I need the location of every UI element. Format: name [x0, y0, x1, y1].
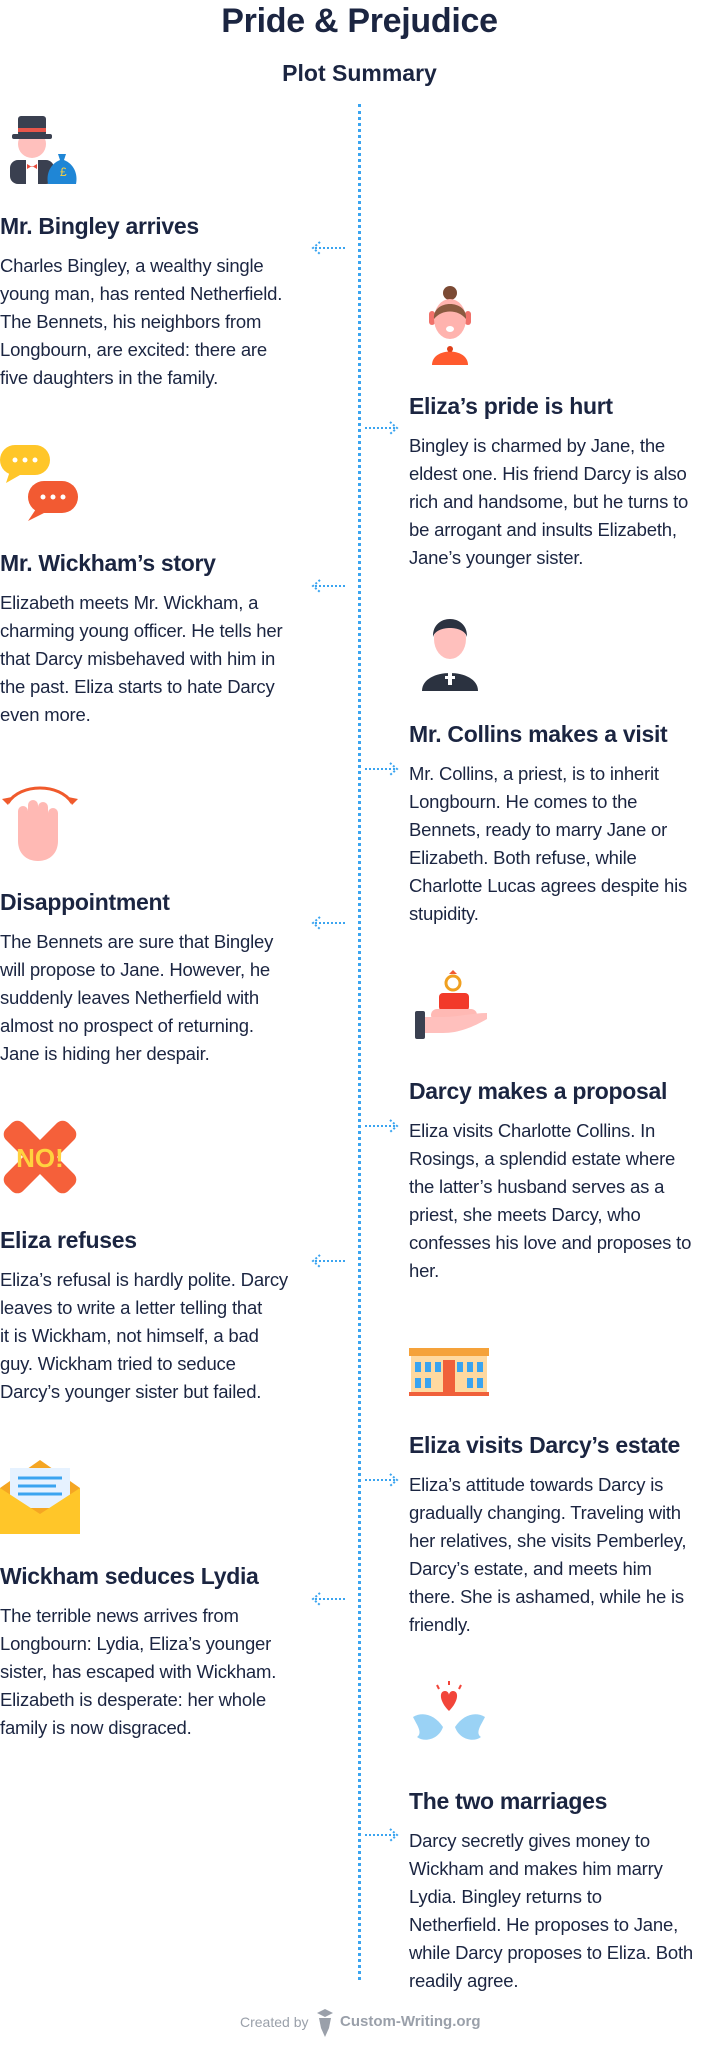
arrow left: [312, 916, 345, 930]
text block: [409, 1120, 691, 1281]
text block: Darcy secretly gives money to: [409, 1830, 650, 1851]
entry: Disappointment: [0, 889, 274, 1064]
text block: her relatives, she visits Pemberley,: [409, 1530, 686, 1551]
text block: confesses his love and proposes to: [409, 1232, 691, 1253]
icon: estate building: [409, 1348, 489, 1396]
text block: the past. Eliza starts to hate Darcy: [0, 676, 275, 697]
text block: Elizabeth meets Mr. Wickham, a: [0, 592, 258, 613]
text block: Eliza’s refusal is hardly polite. Darcy: [0, 1269, 288, 1290]
entry: Eliza refuses: [0, 1227, 288, 1402]
entry: Eliza visits Darcy's estate: [409, 1432, 686, 1635]
heading: Eliza refuses: [0, 1227, 137, 1253]
text block: Longbourn. He comes to the: [409, 791, 637, 812]
text block: sister, has escaped with Wickham.: [0, 1661, 276, 1682]
icon: woman with bun: [429, 286, 471, 365]
text block: young man, has rented Netherfield.: [0, 283, 282, 304]
heading: Mr. Wickham’s story: [0, 550, 216, 576]
text block: friendly.: [409, 1614, 471, 1635]
icon: envelope with letter: [0, 1460, 80, 1534]
text block: Elizabeth. Both refuse, while: [409, 847, 637, 868]
text block: The Bennets are sure that Bingley: [0, 931, 273, 952]
entry: Mr. Collins makes a visit: [409, 721, 687, 924]
text block: suddenly leaves Netherfield with: [0, 987, 259, 1008]
text block: Bennets, ready to marry Jane or: [409, 819, 667, 840]
arrow left: [312, 1254, 345, 1268]
text block: Elizabeth is desperate: her whole: [0, 1689, 266, 1710]
icon: NO sign: [4, 1120, 76, 1194]
arrow left: [312, 1592, 345, 1606]
icon: speech bubbles: [0, 445, 78, 521]
text block: Eliza’s attitude towards Darcy is: [409, 1474, 663, 1495]
text block: The Bennets, his neighbors from: [0, 311, 261, 332]
icon: NO sign: NO!: [16, 1143, 64, 1173]
footer credit: Custom-Writing.org: [340, 2013, 481, 2030]
heading: Disappointment: [0, 889, 170, 915]
text block: the latter’s husband serves as a: [409, 1176, 664, 1197]
arrow right: [365, 1119, 398, 1132]
text block: [0, 1605, 276, 1738]
heading: Wickham seduces Lydia: [0, 1563, 259, 1589]
arrow right: [365, 421, 398, 434]
text block: [0, 255, 282, 388]
text block: Darcy’s estate, and meets him: [409, 1558, 652, 1579]
text block: Jane is hiding her despair.: [0, 1043, 210, 1064]
text block: be arrogant and insults Elizabeth,: [409, 519, 677, 540]
text block: it is Wickham, not himself, a bad: [0, 1325, 259, 1346]
text block: [409, 1474, 686, 1635]
text block: Bingley is charmed by Jane, the: [409, 435, 665, 456]
text block: there. She is ashamed, while he is: [409, 1586, 684, 1607]
text block: [0, 931, 274, 1064]
text block: while Darcy proposes to Eliza. Both: [409, 1942, 693, 1963]
text block: [409, 435, 688, 568]
heading: Eliza’s pride is hurt: [409, 393, 613, 419]
text block: guy. Wickham tried to seduce: [0, 1353, 236, 1374]
entry: Mr. Wickham's story: [0, 550, 282, 725]
icon: priest: [422, 619, 478, 691]
text block: Darcy’s younger sister but failed.: [0, 1381, 261, 1402]
text block: even more.: [0, 704, 91, 725]
text block: [409, 763, 687, 924]
title: Pride & Prejudice: [221, 2, 498, 40]
text block: Longbourn, are excited: there are: [0, 339, 267, 360]
text block: rich and handsome, but he turns to: [409, 491, 688, 512]
entry: Wickham seduces Lydia: [0, 1563, 276, 1738]
text block: will propose to Jane. However, he: [0, 959, 270, 980]
heading: Eliza visits Darcy’s estate: [409, 1432, 680, 1458]
text block: almost no prospect of returning.: [0, 1015, 254, 1036]
arrow left: [312, 579, 345, 592]
text block: Charles Bingley, a wealthy single: [0, 255, 264, 276]
icon: raised hand: [2, 786, 78, 861]
arrow right: [365, 1828, 398, 1842]
icon: gentleman with money bag: [10, 116, 76, 184]
text block: The terrible news arrives from: [0, 1605, 239, 1626]
text block: gradually changing. Traveling with: [409, 1502, 681, 1523]
heading: Mr. Bingley arrives: [0, 213, 199, 239]
text block: Lydia. Bingley returns to: [409, 1886, 602, 1907]
text block: Jane’s younger sister.: [409, 547, 583, 568]
text block: family is now disgraced.: [0, 1717, 192, 1738]
footer credit: Created by: [240, 2014, 308, 2030]
heading: Mr. Collins makes a visit: [409, 721, 667, 747]
footer credit: [236, 2010, 486, 2034]
text block: leaves to write a letter telling that: [0, 1297, 262, 1318]
text block: eldest one. His friend Darcy is also: [409, 463, 687, 484]
text block: Rosings, a splendid estate where: [409, 1148, 675, 1169]
text block: priest, she meets Darcy, who: [409, 1204, 641, 1225]
text block: [0, 1269, 288, 1402]
arrow left: [312, 241, 345, 254]
heading: Darcy makes a proposal: [409, 1078, 667, 1104]
subtitle: Plot Summary: [282, 60, 437, 86]
text block: that Darcy misbehaved with him in: [0, 648, 275, 669]
icon: gentleman with money bag: £: [60, 165, 67, 179]
text block: charming young officer. He tells her: [0, 620, 282, 641]
text block: Eliza visits Charlotte Collins. In: [409, 1120, 655, 1141]
text block: Mr. Collins, a priest, is to inherit: [409, 763, 659, 784]
entry: Darcy makes a proposal: [409, 1078, 691, 1281]
entry: The two marriages: [409, 1788, 693, 1991]
entry: Eliza's pride is hurt: [409, 393, 688, 568]
icon: doves with heart: [413, 1681, 485, 1740]
text block: [409, 1830, 693, 1991]
text block: Wickham and makes him marry: [409, 1858, 663, 1879]
heading: The two marriages: [409, 1788, 607, 1814]
icon: ring box in hand: [415, 970, 487, 1039]
text block: Netherfield. He proposes to Jane,: [409, 1914, 678, 1935]
text block: five daughters in the family.: [0, 367, 218, 388]
text block: her.: [409, 1260, 439, 1281]
arrow right: [365, 1473, 398, 1486]
text block: [0, 592, 282, 725]
text block: readily agree.: [409, 1970, 518, 1991]
arrow right: [365, 762, 398, 776]
text block: Charlotte Lucas agrees despite his: [409, 875, 687, 896]
text block: stupidity.: [409, 903, 479, 924]
entry: Mr. Bingley arrives: [0, 213, 282, 388]
icon: pen nib logo: [316, 2008, 334, 2038]
text block: Longbourn: Lydia, Eliza’s younger: [0, 1633, 271, 1654]
